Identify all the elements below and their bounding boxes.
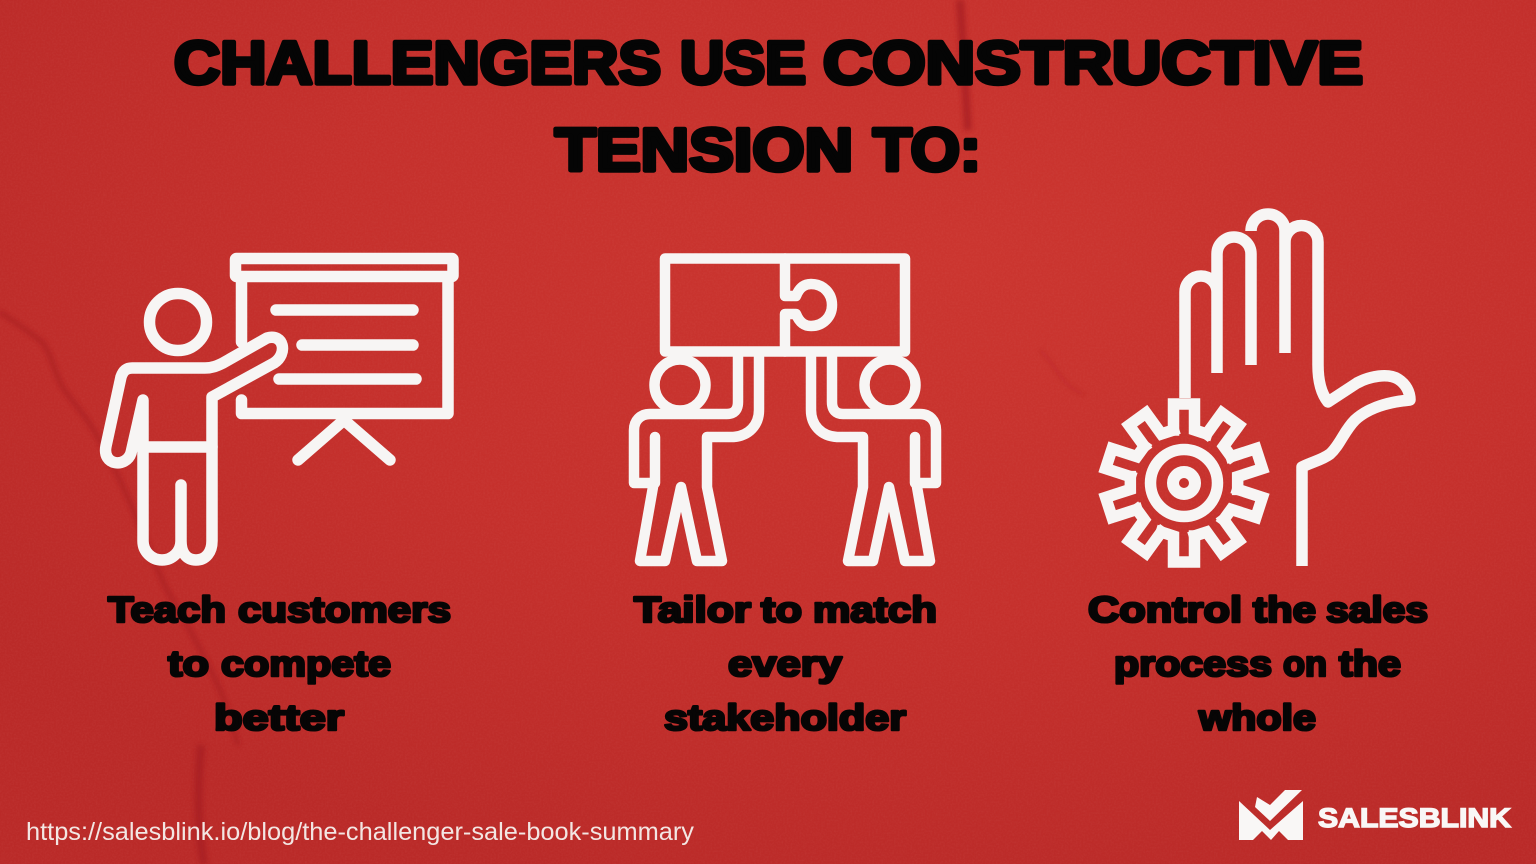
caption: control the sales process: sales <box>1326 589 1428 630</box>
caption: tailor to match: to <box>761 589 802 630</box>
caption: tailor to match: match <box>813 589 937 630</box>
logo wordmark: SALESBLINK <box>1318 803 1512 833</box>
caption: teach customers: customers <box>238 589 451 630</box>
board frame <box>242 282 448 414</box>
caption: tailor to match <box>634 589 937 738</box>
caption: control the sales process: whole <box>1198 697 1316 738</box>
icon: teacher at presentation board <box>106 258 453 560</box>
board top roller <box>236 258 453 276</box>
right person body <box>811 357 936 561</box>
title: USE <box>680 30 806 96</box>
caption: tailor to match: Tailor <box>634 589 751 630</box>
puzzle joint <box>785 258 832 352</box>
caption: control the sales process: on <box>1283 643 1327 684</box>
title: CHALLENGERS <box>174 30 661 96</box>
presenter body and pointing arm <box>106 337 282 560</box>
caption: tailor to match: stakeholder <box>664 697 906 738</box>
presenter waist <box>143 441 212 453</box>
board text lines <box>276 310 416 379</box>
caption: teach customers: to <box>168 643 209 684</box>
gear teeth <box>1102 404 1266 562</box>
source url: https://salesblink.io/blog/the-challenger-sale-book-summary <box>26 818 694 846</box>
icon: hand with gear <box>1102 214 1410 566</box>
caption: teach customers <box>108 589 451 738</box>
logo mark <box>1239 790 1303 840</box>
hand outline <box>1185 214 1410 566</box>
caption: tailor to match: every <box>728 643 842 684</box>
caption: teach customers: Teach <box>108 589 226 630</box>
presenter head <box>150 294 206 350</box>
gear inner rings <box>1150 450 1218 516</box>
caption: control the sales process: Control <box>1088 589 1242 630</box>
caption: teach customers: compete <box>221 643 391 684</box>
icon: two people holding puzzle pieces <box>634 258 936 561</box>
caption: control the sales process: process <box>1114 643 1272 684</box>
caption: control the sales process <box>1088 589 1428 738</box>
title: CONSTRUCTIVE <box>823 30 1363 96</box>
caption: teach customers: better <box>214 697 344 738</box>
logo: salesblink <box>1239 790 1512 840</box>
puzzle outline <box>665 258 905 352</box>
board stand <box>298 420 390 460</box>
right person head <box>864 360 916 410</box>
title <box>174 30 1363 184</box>
title: TO: <box>873 116 981 184</box>
left person body <box>634 357 759 561</box>
caption: control the sales process: the <box>1253 589 1316 630</box>
title: TENSION <box>555 116 853 184</box>
left person head <box>654 360 706 410</box>
caption: control the sales process: the <box>1339 643 1401 684</box>
